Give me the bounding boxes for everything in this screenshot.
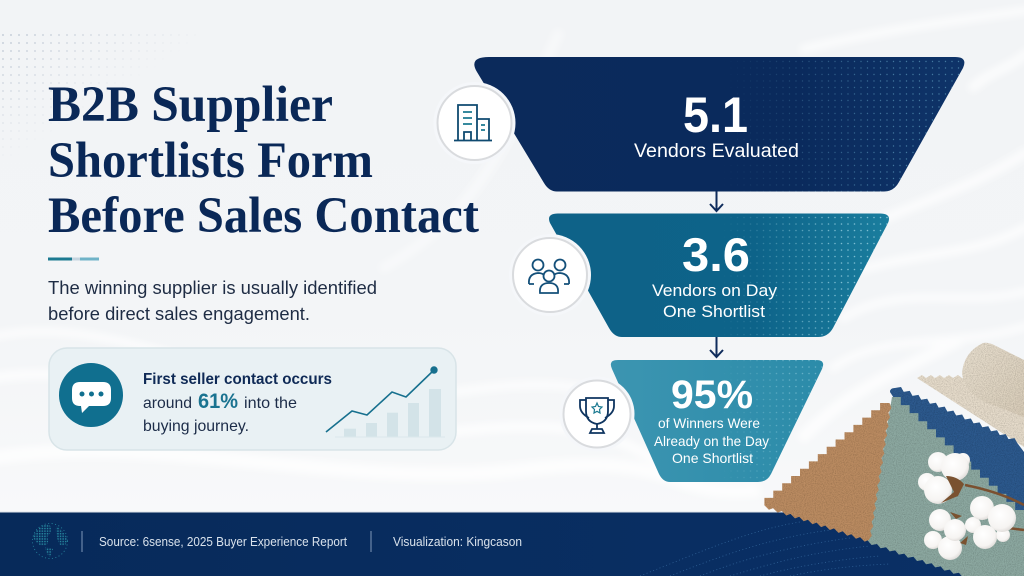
icon: speech bubble [59, 363, 123, 427]
cotton boll lower right [965, 496, 1016, 549]
accent divider [48, 258, 99, 260]
funnel tier 3 [608, 358, 828, 484]
callout text: 61% [198, 390, 238, 413]
callout text: around [143, 395, 192, 412]
cotton boll lower left [924, 509, 968, 560]
funnel tier 3: Already on the Day [654, 433, 769, 449]
beige swatch [917, 375, 1024, 447]
title: Shortlists Form [48, 133, 373, 189]
callout text: buying journey. [143, 418, 249, 435]
arrow 1 [710, 191, 723, 211]
funnel tier 1 [474, 57, 964, 192]
subtitle: The winning supplier is usually identified [48, 278, 377, 298]
subtitle: before direct sales engagement. [48, 304, 310, 324]
callout text [143, 371, 332, 435]
icon badge: trophy [560, 376, 634, 452]
funnel tier 3: One Shortlist [672, 450, 753, 466]
funnel tier 1: Vendors Evaluated [634, 141, 799, 162]
credit text: Visualization: Kingcason [393, 535, 522, 549]
callout card [49, 348, 456, 450]
green swatch [868, 397, 1024, 576]
subtitle [48, 278, 377, 324]
title [48, 77, 479, 244]
arrow 2 [710, 337, 723, 357]
icon badge: building [434, 82, 516, 164]
funnel tier 2: One Shortlist [663, 302, 765, 321]
source text: Source: 6sense, 2025 Buyer Experience Report [99, 535, 347, 549]
funnel tier 2: 3.6 [682, 228, 750, 281]
funnel tier 1: 5.1 [683, 87, 748, 143]
callout text: First seller contact occurs [143, 371, 332, 388]
dot pattern: top left [2, 34, 180, 148]
icon: dotted globe [32, 524, 68, 558]
footer [0, 512, 1024, 576]
fabric roll [962, 343, 1024, 417]
funnel tier 2: Vendors on Day [652, 281, 778, 300]
cotton boll top [918, 452, 970, 504]
title: Before Sales Contact [48, 188, 479, 244]
mini chart [326, 366, 445, 438]
funnel tier 2 [545, 210, 895, 340]
blue swatch [890, 387, 1024, 530]
fabric swatches and cotton [764, 343, 1024, 576]
brown swatch [764, 403, 891, 542]
footer wave texture [640, 522, 890, 576]
title: B2B Supplier [48, 77, 333, 133]
cotton stem [965, 485, 1024, 530]
icon badge: people [509, 234, 591, 316]
funnel tier 3: 95% [671, 373, 753, 417]
funnel tier 3: of Winners Were [658, 415, 760, 431]
callout text: into the [244, 395, 297, 412]
